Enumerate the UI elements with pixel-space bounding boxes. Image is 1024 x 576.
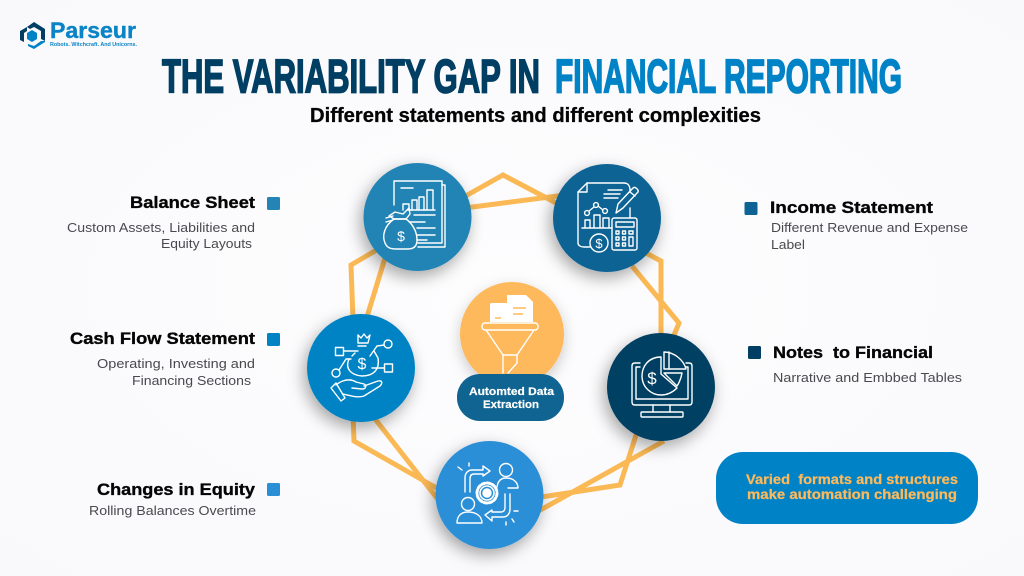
icon: people, gear and arrows (457, 463, 518, 525)
node: Balance Sheet icon (364, 163, 472, 271)
label: Income Statement (744, 198, 968, 252)
label: Changes in Equity (89, 480, 280, 518)
label: Income Statement: Label (771, 237, 805, 252)
callout: automation challenge: make automation challenging (747, 486, 957, 502)
icon: document, chart, pen, calculator: $ (595, 236, 603, 251)
node: Cash Flow icon (307, 314, 415, 422)
center: Automated Data Extraction label: Extraction (483, 399, 539, 411)
label: Cash Flow Statement: Operating, Investing and (97, 356, 255, 371)
node: Notes icon (607, 333, 715, 441)
icon: Parseur hexagon mark (20, 22, 45, 49)
callout: automation challenge (716, 452, 978, 524)
center: Automated Data Extraction label (457, 374, 564, 421)
center: funnel node (460, 282, 564, 386)
label: Cash Flow Statement: Financing Sections (132, 373, 252, 388)
logo wordmark: Parseur (50, 18, 136, 43)
label: Cash Flow Statement (70, 329, 280, 388)
label: Income Statement: Income Statement (770, 198, 933, 217)
node: Changes in Equity icon (436, 441, 544, 549)
label: Notes to Financial: Narrative and Embbed Tables (773, 370, 963, 385)
node: Income Statement icon (553, 164, 661, 272)
title: THE VARIABILITY GAP IN (162, 50, 540, 102)
label: Balance Sheet: Custom Assets, Liabilities and (67, 220, 255, 235)
label: Notes to Financial (748, 343, 963, 385)
icon: money bag network and hand: $ (358, 356, 367, 373)
connecting gold polygon lines (351, 175, 679, 513)
label: Income Statement: Different Revenue and Expense (771, 220, 968, 235)
label: Balance Sheet: Equity Layouts (161, 236, 253, 251)
logo: Parseur (20, 18, 138, 49)
icon: report and money bag: $ (397, 228, 405, 244)
logo tagline: Robots. Witchcraft. And Unicorns. (50, 42, 138, 48)
callout: automation challenge: Varied formats and structures (746, 471, 958, 487)
label: Balance Sheet: Balance Sheet (130, 193, 255, 212)
label: Notes to Financial: Notes to Financial (773, 343, 933, 362)
label: Changes in Equity: Changes in Equity (97, 480, 256, 499)
icon: funnel with documents (482, 295, 538, 373)
label: Cash Flow Statement: Cash Flow Statement (70, 329, 255, 348)
label: Changes in Equity: Rolling Balances Overtime (89, 503, 256, 518)
label: Balance Sheet (67, 193, 280, 251)
center: Automated Data Extraction label: Automted Data (469, 386, 555, 398)
icon: monitor with pie chart: $ (647, 369, 657, 388)
subtitle: Different statements and different complexities (310, 105, 761, 127)
